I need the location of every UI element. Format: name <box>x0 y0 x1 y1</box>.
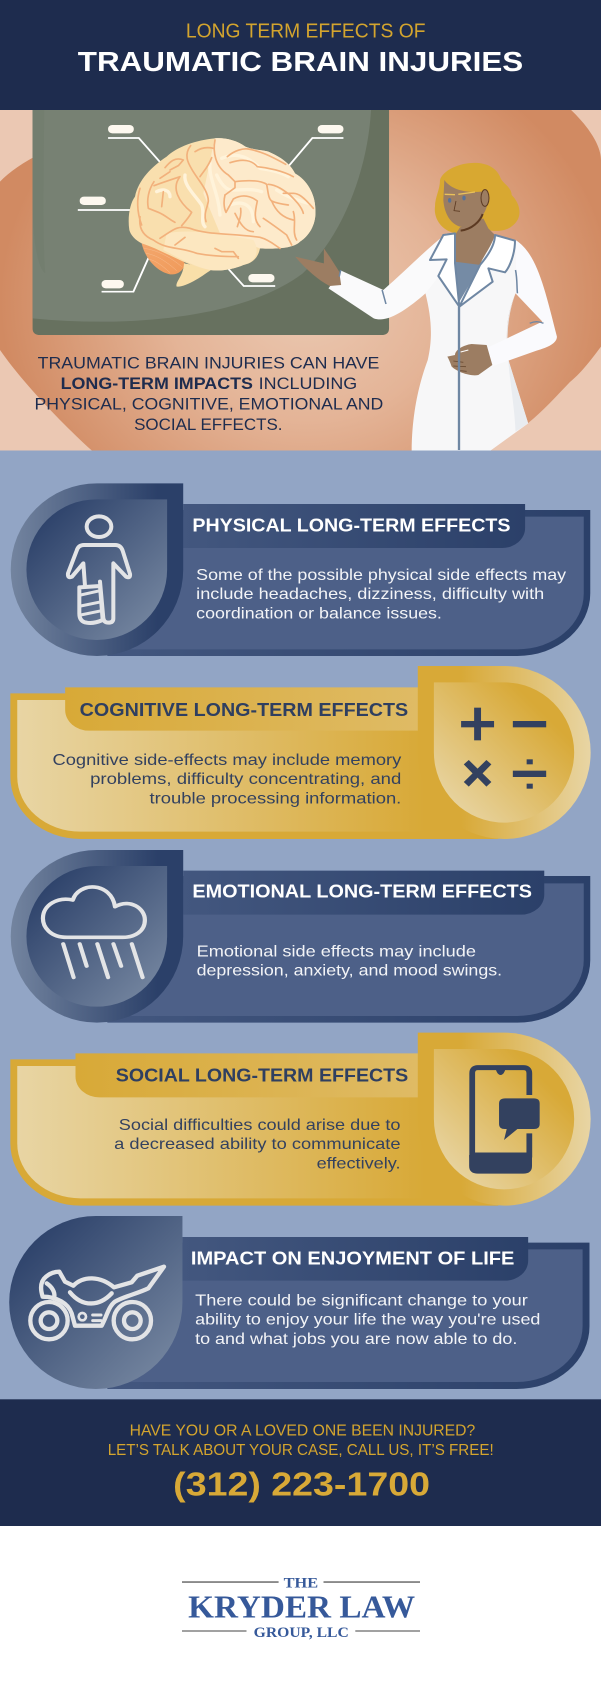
enjoyment text: There could be significant change to your <box>195 1293 529 1310</box>
cognitive text: trouble processing information. <box>150 790 401 807</box>
card: cognitive <box>10 666 591 839</box>
physical text: Some of the possible physical side effects may <box>196 567 566 584</box>
card: physical <box>11 483 590 656</box>
social text: Social difficulties could arise due to <box>119 1117 401 1134</box>
hero panel <box>0 76 601 451</box>
presentation board <box>33 110 389 335</box>
header band <box>0 0 601 110</box>
emotional text <box>197 944 502 980</box>
physical text: include headaches, dizziness, difficulty with <box>196 586 544 603</box>
doctor head and collar <box>430 163 519 450</box>
logo <box>182 1575 420 1641</box>
icon: rain cloud <box>43 887 145 977</box>
icon: math symbols <box>461 708 546 789</box>
emotional heading: EMOTIONAL LONG-TERM EFFECTS <box>192 881 532 902</box>
cognitive text <box>52 752 401 807</box>
social text: effectively. <box>317 1155 400 1172</box>
hero text: INCLUDING <box>259 374 357 393</box>
enjoyment text <box>195 1293 540 1348</box>
logo: THE <box>284 1575 318 1591</box>
hero text: LONG-TERM IMPACTS <box>61 374 253 393</box>
phone number: (312) 223-1700 <box>173 1465 430 1502</box>
footer call to action <box>0 1399 601 1526</box>
hero orange blob <box>0 76 601 451</box>
cta text <box>108 1423 494 1459</box>
cognitive text: Cognitive side-effects may include memory <box>52 752 401 769</box>
brain folds, lower <box>140 212 297 258</box>
header kicker: LONG TERM EFFECTS OF <box>186 21 426 43</box>
emotional text: Emotional side effects may include <box>197 944 476 961</box>
card: social <box>10 1033 591 1206</box>
emotional text: depression, anxiety, and mood swings. <box>197 963 502 980</box>
hero text: TRAUMATIC BRAIN INJURIES CAN HAVE <box>38 354 379 373</box>
main title: TRAUMATIC BRAIN INJURIES <box>78 46 523 77</box>
icon: person with leg cast <box>68 516 130 623</box>
doctor figure <box>295 163 557 451</box>
brain illustration <box>129 138 316 287</box>
physical heading: PHYSICAL LONG-TERM EFFECTS <box>192 514 510 535</box>
cognitive heading: COGNITIVE LONG-TERM EFFECTS <box>80 699 408 720</box>
icon: phone with chat bubble <box>469 1067 540 1174</box>
social text <box>114 1117 401 1172</box>
cognitive text: problems, difficulty concentrating, and <box>90 771 401 788</box>
cta text: HAVE YOU OR A LOVED ONE BEEN INJURED? <box>130 1423 476 1440</box>
doctor coat <box>295 233 557 451</box>
social heading: SOCIAL LONG-TERM EFFECTS <box>116 1065 408 1086</box>
hero text <box>34 354 383 434</box>
social text: a decreased ability to communicate <box>114 1136 401 1153</box>
brain outline and shading <box>129 138 316 287</box>
enjoyment text: ability to enjoy your life the way you're used <box>195 1312 540 1329</box>
blue background panel <box>0 450 601 1400</box>
brain highlights and folds, upper <box>138 140 313 227</box>
enjoyment text: to and what jobs you are now able to do. <box>195 1331 517 1348</box>
enjoyment heading: IMPACT ON ENJOYMENT OF LIFE <box>191 1248 514 1269</box>
hero text: PHYSICAL, COGNITIVE, EMOTIONAL AND <box>34 394 383 413</box>
cta text: LET’S TALK ABOUT YOUR CASE, CALL US, IT’S FREE! <box>108 1442 494 1459</box>
card: enjoyment of life <box>9 1216 590 1389</box>
logo: KRYDER LAW <box>188 1588 415 1624</box>
card: emotional <box>11 850 590 1023</box>
physical text <box>196 567 566 623</box>
hero text: SOCIAL EFFECTS. <box>134 415 282 434</box>
logo: GROUP, LLC <box>254 1625 349 1641</box>
brain labels <box>78 125 343 292</box>
icon: motorcycle <box>30 1267 164 1339</box>
doctor hand <box>447 344 492 375</box>
physical text: coordination or balance issues. <box>196 606 442 623</box>
